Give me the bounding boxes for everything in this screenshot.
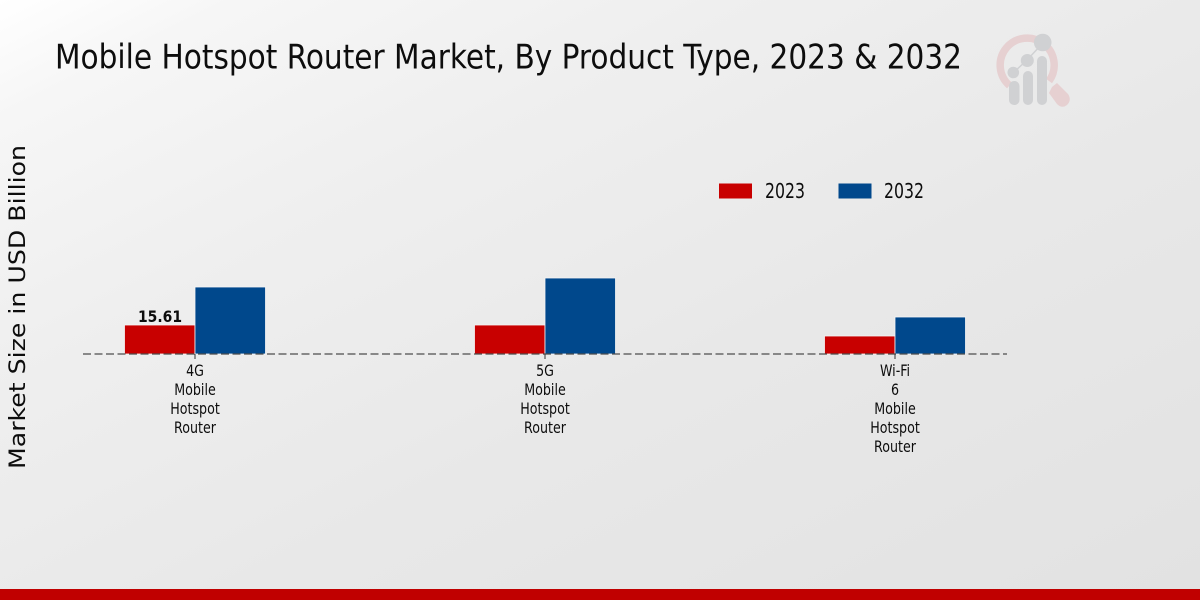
legend item: 2032 (838, 179, 924, 203)
group: Wi-Fi 6 Mobile Hotspot Router (824, 317, 966, 354)
x label: 4G: Hotspot (170, 399, 220, 418)
x label: 5G: Mobile (524, 380, 566, 399)
bar: Wi-Fi 6 2023 (824, 336, 895, 354)
bar: 5G 2032 (545, 278, 616, 354)
footer bar (0, 589, 1200, 600)
legend item: 2023 (719, 179, 805, 203)
x-axis baseline (83, 353, 1007, 355)
bar: Wi-Fi 6 2032 (895, 317, 966, 354)
title: Mobile Hotspot Router Market, By Product Type, 2023 & 2032 (55, 38, 962, 76)
legend item: 2023: 2023 (765, 179, 805, 203)
bar: 5G 2023 (474, 325, 545, 354)
x label: 5G: Hotspot (520, 399, 570, 418)
group: 4G Mobile Hotspot Router (124, 287, 266, 354)
x label: 5G: Router (524, 418, 566, 437)
x label: Wi-Fi 6: Hotspot (870, 418, 920, 437)
group: 5G Mobile Hotspot Router (474, 278, 616, 354)
legend item: 2032: 2032 (884, 179, 924, 203)
value label: 15.61 (138, 307, 182, 326)
bar: 4G 2023 (124, 325, 195, 354)
x label: Wi-Fi 6: Mobile (874, 399, 916, 418)
x label: 4G: 4G (186, 361, 204, 380)
x label: 5G: 5G (536, 361, 554, 380)
icon: magnifier logo (1000, 34, 1070, 107)
x label: 4G: Router (174, 418, 216, 437)
x label: Wi-Fi 6: Router (874, 437, 916, 456)
x label: Wi-Fi 6: Wi-Fi (880, 361, 910, 380)
x label: Wi-Fi 6: 6 (891, 380, 899, 399)
bar: 4G 2032 (195, 287, 266, 354)
y-axis label: Market Size in USD Billion (5, 145, 31, 469)
bar chart (83, 278, 1007, 359)
legend (719, 179, 924, 203)
x label: 4G: Mobile (174, 380, 216, 399)
